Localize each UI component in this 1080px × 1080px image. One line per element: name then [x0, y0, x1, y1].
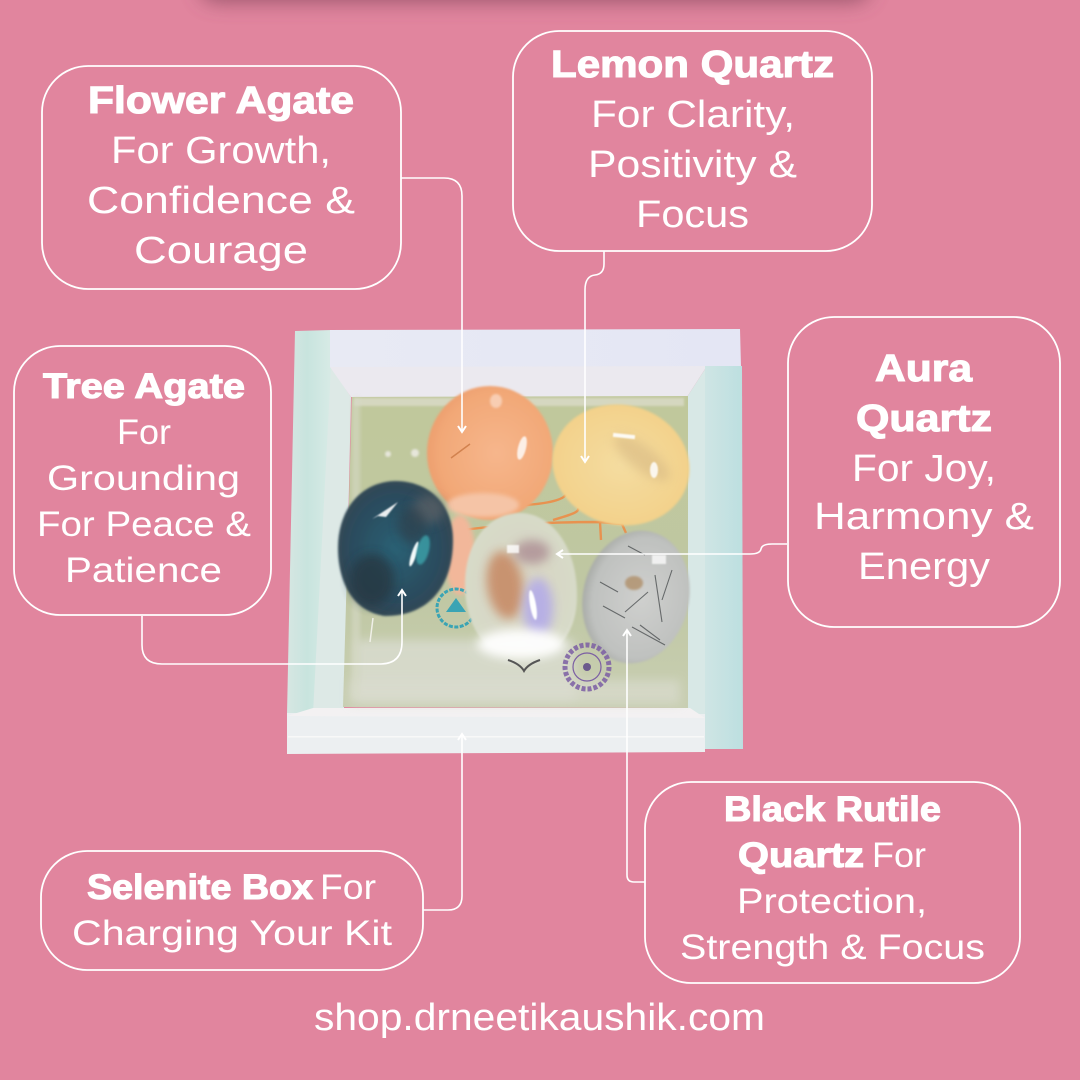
stone: tree agate: [338, 481, 453, 616]
callout: lemon quartz: [513, 31, 872, 251]
orange tree lines: [455, 494, 626, 540]
callout: flower agate: Flower Agate: [88, 80, 354, 122]
stone: lemon quartz: [540, 390, 702, 540]
callout: selenite box: Selenite Box: [87, 868, 314, 907]
callout: lemon quartz: For Clarity,: [591, 94, 795, 136]
callout: tree agate: [14, 346, 271, 615]
callout: flower agate: Courage: [134, 230, 308, 272]
callout: aura quartz: For Joy,: [852, 448, 996, 490]
callout: selenite box: For: [320, 868, 376, 907]
callout: tree agate: For Peace &: [37, 505, 251, 544]
callout: black rutile quartz: Quartz: [738, 836, 864, 875]
callout: lemon quartz: Lemon Quartz: [551, 44, 834, 86]
connector: flower agate: [401, 178, 466, 432]
callout: black rutile quartz: Strength & Focus: [680, 928, 985, 967]
stone: black rutile quartz: [569, 520, 703, 674]
callout: lemon quartz: Focus: [636, 194, 749, 236]
connector: lemon quartz: [581, 251, 604, 462]
footer url: shop.drneetikaushik.com: [314, 997, 765, 1039]
callout: black rutile quartz: Black Rutile: [724, 790, 941, 829]
callout: flower agate: For Growth,: [111, 130, 331, 172]
pink chip behind stones: [445, 515, 475, 595]
callout: tree agate: For: [117, 413, 171, 452]
callout: selenite box: [41, 851, 423, 970]
callout: aura quartz: Harmony &: [814, 496, 1034, 538]
callout: black rutile quartz: [645, 782, 1020, 983]
connector: black rutile quartz: [623, 630, 645, 882]
callout: flower agate: [42, 66, 401, 289]
callout: aura quartz: [788, 317, 1060, 627]
chakra symbol: purple crown: [565, 645, 609, 689]
callout: tree agate: Patience: [65, 551, 222, 590]
connector: aura quartz: [557, 544, 787, 558]
chakra symbol: teal: [437, 589, 475, 627]
stone: flower agate: [427, 386, 553, 520]
callout: tree agate: Grounding: [47, 459, 240, 498]
callout: black rutile quartz: Protection,: [737, 882, 927, 921]
callout: aura quartz: Quartz: [856, 398, 992, 440]
callout: black rutile quartz: For: [872, 836, 926, 875]
selenite box floor: [343, 396, 688, 708]
callout: aura quartz: Aura: [875, 348, 973, 390]
connector: selenite box: [423, 734, 466, 910]
stone: aura quartz: [465, 513, 577, 660]
callout: lemon quartz: Positivity &: [588, 144, 797, 186]
connector: tree agate: [142, 590, 406, 664]
callout: tree agate: Tree Agate: [43, 367, 245, 406]
chakra symbol: heart outline: [508, 660, 540, 671]
callout: aura quartz: Energy: [858, 546, 990, 588]
top shadow band: [200, 0, 870, 2]
callout: selenite box: Charging Your Kit: [72, 914, 392, 953]
selenite box frame: [287, 329, 743, 754]
photo: selenite box with stones: [287, 329, 743, 754]
callout: flower agate: Confidence &: [87, 180, 355, 222]
